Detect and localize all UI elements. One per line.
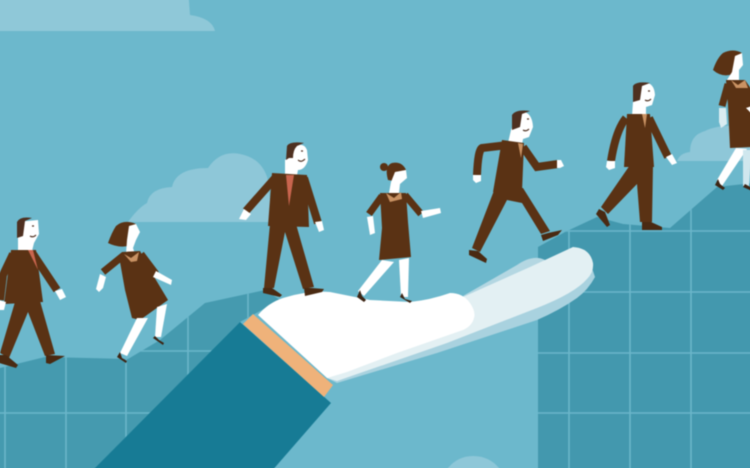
hand	[258, 247, 595, 383]
finger shadow	[327, 262, 595, 383]
cloud: bottom	[440, 456, 506, 468]
cloud: right	[677, 126, 750, 161]
woman 4	[357, 163, 441, 303]
sleeve	[83, 322, 331, 468]
man 3	[239, 142, 324, 297]
right stepped block	[538, 180, 750, 468]
thumb behind	[463, 258, 545, 310]
cloud: top left	[0, 0, 215, 31]
left stepped block	[0, 290, 279, 468]
man 5 running	[469, 110, 564, 263]
man 6	[596, 82, 677, 230]
fingers	[327, 247, 593, 381]
cuff	[243, 314, 333, 397]
cloud: centre	[128, 153, 272, 222]
woman 2	[96, 222, 172, 363]
palm	[258, 292, 474, 378]
woman 7	[713, 50, 750, 191]
man 1	[0, 218, 66, 368]
